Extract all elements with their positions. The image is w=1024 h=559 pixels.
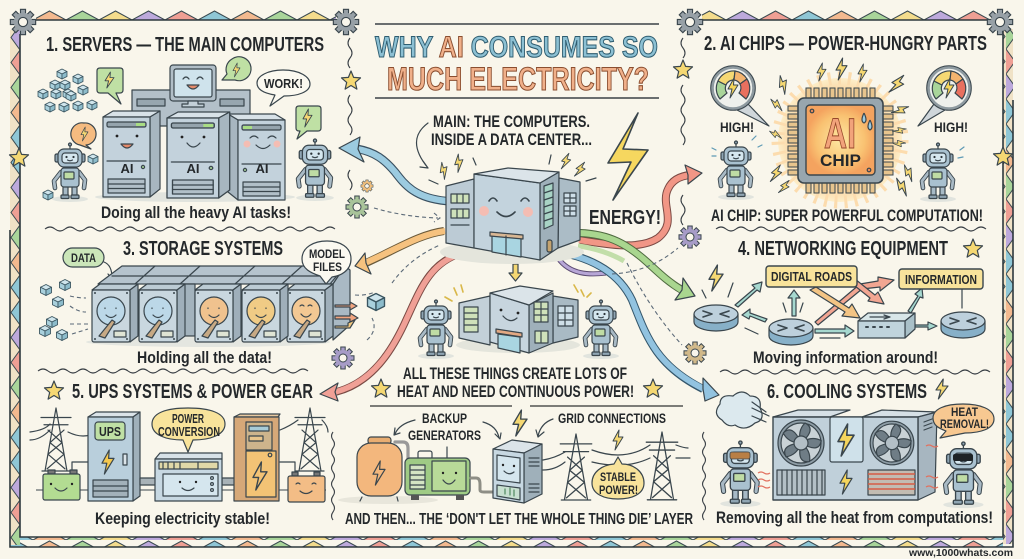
AI chip — [788, 88, 893, 193]
backup generators label: GENERATORS — [408, 428, 481, 443]
output arrows — [335, 302, 358, 328]
center panel: data center — [416, 113, 661, 264]
caption: Keeping electricity stable! — [95, 510, 270, 528]
server group: AI — [256, 161, 268, 176]
routers and switch — [694, 265, 985, 345]
high labels: HIGH! — [720, 119, 754, 135]
dashed links — [355, 208, 682, 345]
arrow: purple — [558, 258, 606, 274]
arrow: down — [509, 264, 522, 281]
high labels: HIGH! — [934, 119, 968, 135]
cheering robots — [418, 300, 619, 359]
AI chip: AI — [824, 110, 856, 158]
caption: Holding all the data! — [137, 349, 272, 367]
panel: 5 UPS — [30, 381, 328, 528]
panel: 6 cooling — [716, 379, 994, 527]
panel: center lower — [338, 285, 693, 528]
transfer switch box — [493, 440, 542, 503]
data cubes — [38, 69, 98, 200]
heat removal bubble: HEAT — [951, 405, 979, 419]
layer caption: AND THEN... THE ‘DON'T LET THE WHOLE THING DIE’ LAYER — [345, 511, 693, 528]
website credit: www,1000whats.com — [908, 548, 1013, 559]
information label: INFORMATION — [905, 272, 977, 287]
center note: MAIN: THE COMPUTERS. — [433, 113, 590, 131]
small bolts — [429, 152, 596, 184]
robots — [52, 139, 334, 202]
gauges — [711, 66, 971, 126]
heading: UPS: 5. UPS SYSTEMS & POWER GEAR — [72, 381, 313, 403]
server group: AI — [186, 161, 200, 176]
robots with heat marks — [720, 441, 984, 508]
network arrows — [735, 277, 962, 338]
model files bubble: MODEL — [309, 249, 345, 261]
energy label: ENERGY! — [589, 207, 661, 229]
stressed robots — [712, 136, 964, 202]
caption: Moving information around! — [753, 349, 938, 367]
orange cabinet — [234, 414, 280, 501]
chip burst — [778, 78, 902, 202]
panel: 1 servers — [38, 34, 334, 222]
heading: storage: 3. STORAGE SYSTEMS — [123, 238, 283, 260]
bolts in lower center — [513, 410, 623, 450]
grid connections label — [536, 411, 666, 437]
corner and connector gears — [10, 9, 1013, 369]
icon: cloud with air — [716, 392, 769, 428]
caption: Doing all the heavy AI tasks! — [101, 204, 291, 222]
battery green — [43, 462, 88, 500]
stars — [10, 60, 1012, 399]
title block — [375, 24, 659, 98]
heading: servers: 1. SERVERS — THE MAIN COMPUTERS — [46, 34, 324, 56]
bolts around chip — [768, 58, 918, 197]
hard drives — [86, 266, 350, 347]
icon: heading bolt — [936, 379, 948, 399]
backup generators label — [394, 411, 501, 443]
curved pointer arrow — [416, 123, 428, 168]
panel: 3 storage — [40, 238, 384, 367]
panel: 4 networking — [694, 238, 985, 367]
model files bubble — [302, 241, 351, 284]
speech bubbles: WORK! — [264, 76, 303, 91]
flow arrows from data center — [320, 137, 719, 401]
cooling unit — [773, 410, 937, 500]
heat removal bubble — [933, 404, 994, 438]
heat and power message — [397, 364, 634, 401]
panel: 2 AI chips — [704, 33, 987, 225]
digital roads label — [766, 266, 857, 287]
smiling monitor — [170, 65, 216, 107]
heat and power message: ALL THESE THINGS CREATE LOTS OF — [403, 364, 627, 383]
grid connections label: GRID CONNECTIONS — [558, 411, 666, 426]
cubes and flow — [40, 280, 384, 340]
arrow: to AI chips — [579, 165, 702, 245]
arrow: to UPS — [320, 253, 463, 401]
small data center building — [445, 285, 591, 353]
center panel: data center: INSIDE A DATA CENTER... — [431, 131, 592, 149]
digital roads label: DIGITAL ROADS — [771, 269, 852, 284]
stable power bubble: POWER! — [599, 485, 638, 497]
tank — [338, 437, 438, 504]
heading: cooling: 6. COOLING SYSTEMS — [767, 381, 927, 403]
backup generators label: BACKUP — [422, 411, 467, 426]
data pill — [63, 248, 115, 279]
arrow: to storage — [355, 231, 445, 274]
generator — [405, 447, 493, 500]
power conversion bubble: POWER — [172, 412, 204, 426]
high labels — [720, 119, 968, 135]
title text line 1: WHY AI CONSUMES SO — [375, 31, 658, 64]
server group: AI — [120, 161, 134, 176]
model files bubble: FILES — [313, 262, 342, 274]
heading: networking: 4. NETWORKING EQUIPMENT — [738, 238, 948, 260]
power conversion bubble — [152, 408, 225, 452]
server group — [95, 65, 295, 202]
icon: big lightning bolt — [608, 113, 648, 200]
power conversion bubble: CONVERSION — [158, 425, 220, 439]
speech bubbles — [71, 57, 321, 149]
information label — [899, 269, 983, 289]
title text line 2: MUCH ELECTRICITY? — [387, 61, 649, 97]
pylons and wiring — [30, 408, 328, 490]
heat and power message: HEAT AND NEED CONTINUOUS POWER! — [397, 382, 634, 401]
stable power bubble: STABLE — [600, 472, 636, 484]
data pill: DATA — [71, 251, 96, 265]
UPS cabinet — [88, 412, 140, 501]
smiling data center building — [440, 168, 584, 264]
arrow: to cooling — [557, 252, 719, 401]
arrow: to servers — [339, 137, 447, 201]
power conversion unit — [140, 453, 236, 501]
heat removal bubble: REMOVAL! — [940, 417, 989, 431]
power lines and pylons — [543, 432, 690, 500]
arrow: to networking — [579, 233, 695, 300]
UPS cabinet: UPS — [99, 424, 121, 439]
arrow: light green — [578, 246, 624, 261]
AI chip: CHIP — [820, 151, 861, 170]
stable power bubble — [592, 457, 644, 499]
battery orange — [280, 462, 325, 502]
